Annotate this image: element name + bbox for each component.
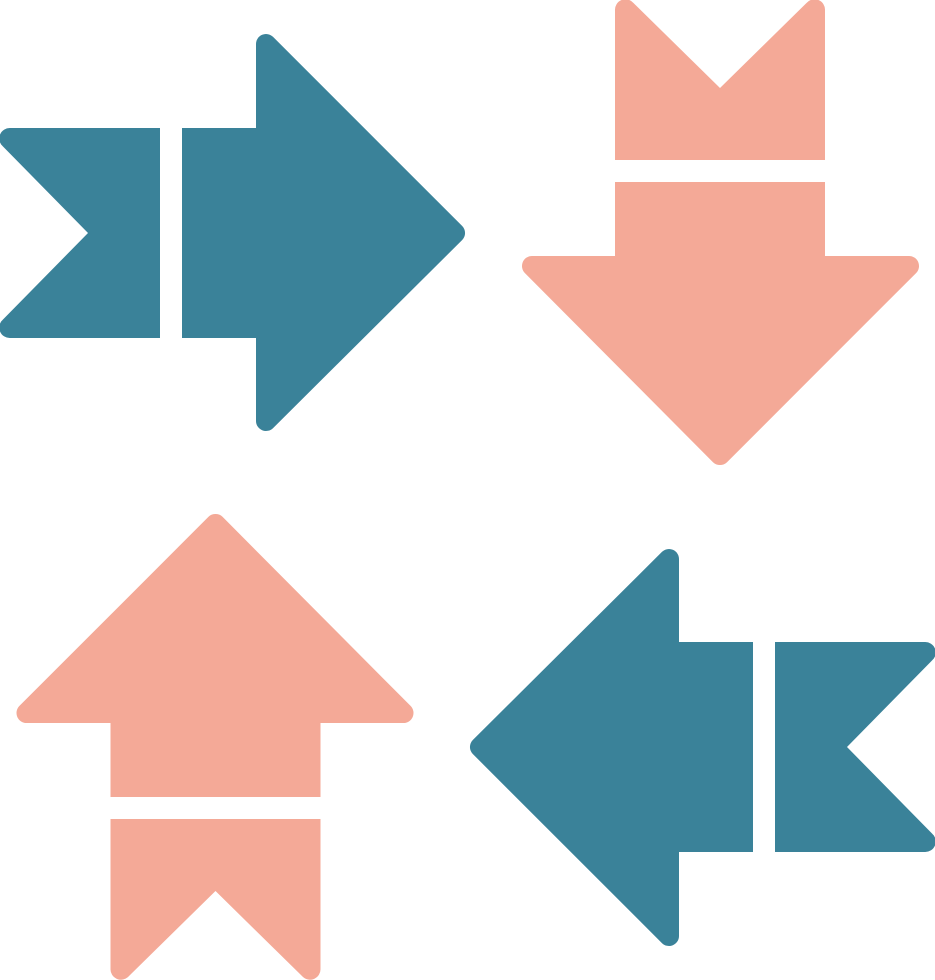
arrow: teal pointing right [0,34,465,431]
arrow: teal pointing left [470,549,935,946]
arrow head and shaft [182,34,465,431]
arrow head and shaft [470,549,753,946]
arrow head and shaft [522,182,919,465]
arrow: salmon pointing down [522,0,919,465]
arrow tail: notched ribbon [0,128,160,338]
arrow tail: notched ribbon [615,0,825,160]
arrow tail: notched ribbon [775,642,935,852]
arrow head and shaft [17,514,413,797]
arrow tail: notched ribbon [110,819,321,980]
arrow: salmon pointing up [17,514,413,980]
